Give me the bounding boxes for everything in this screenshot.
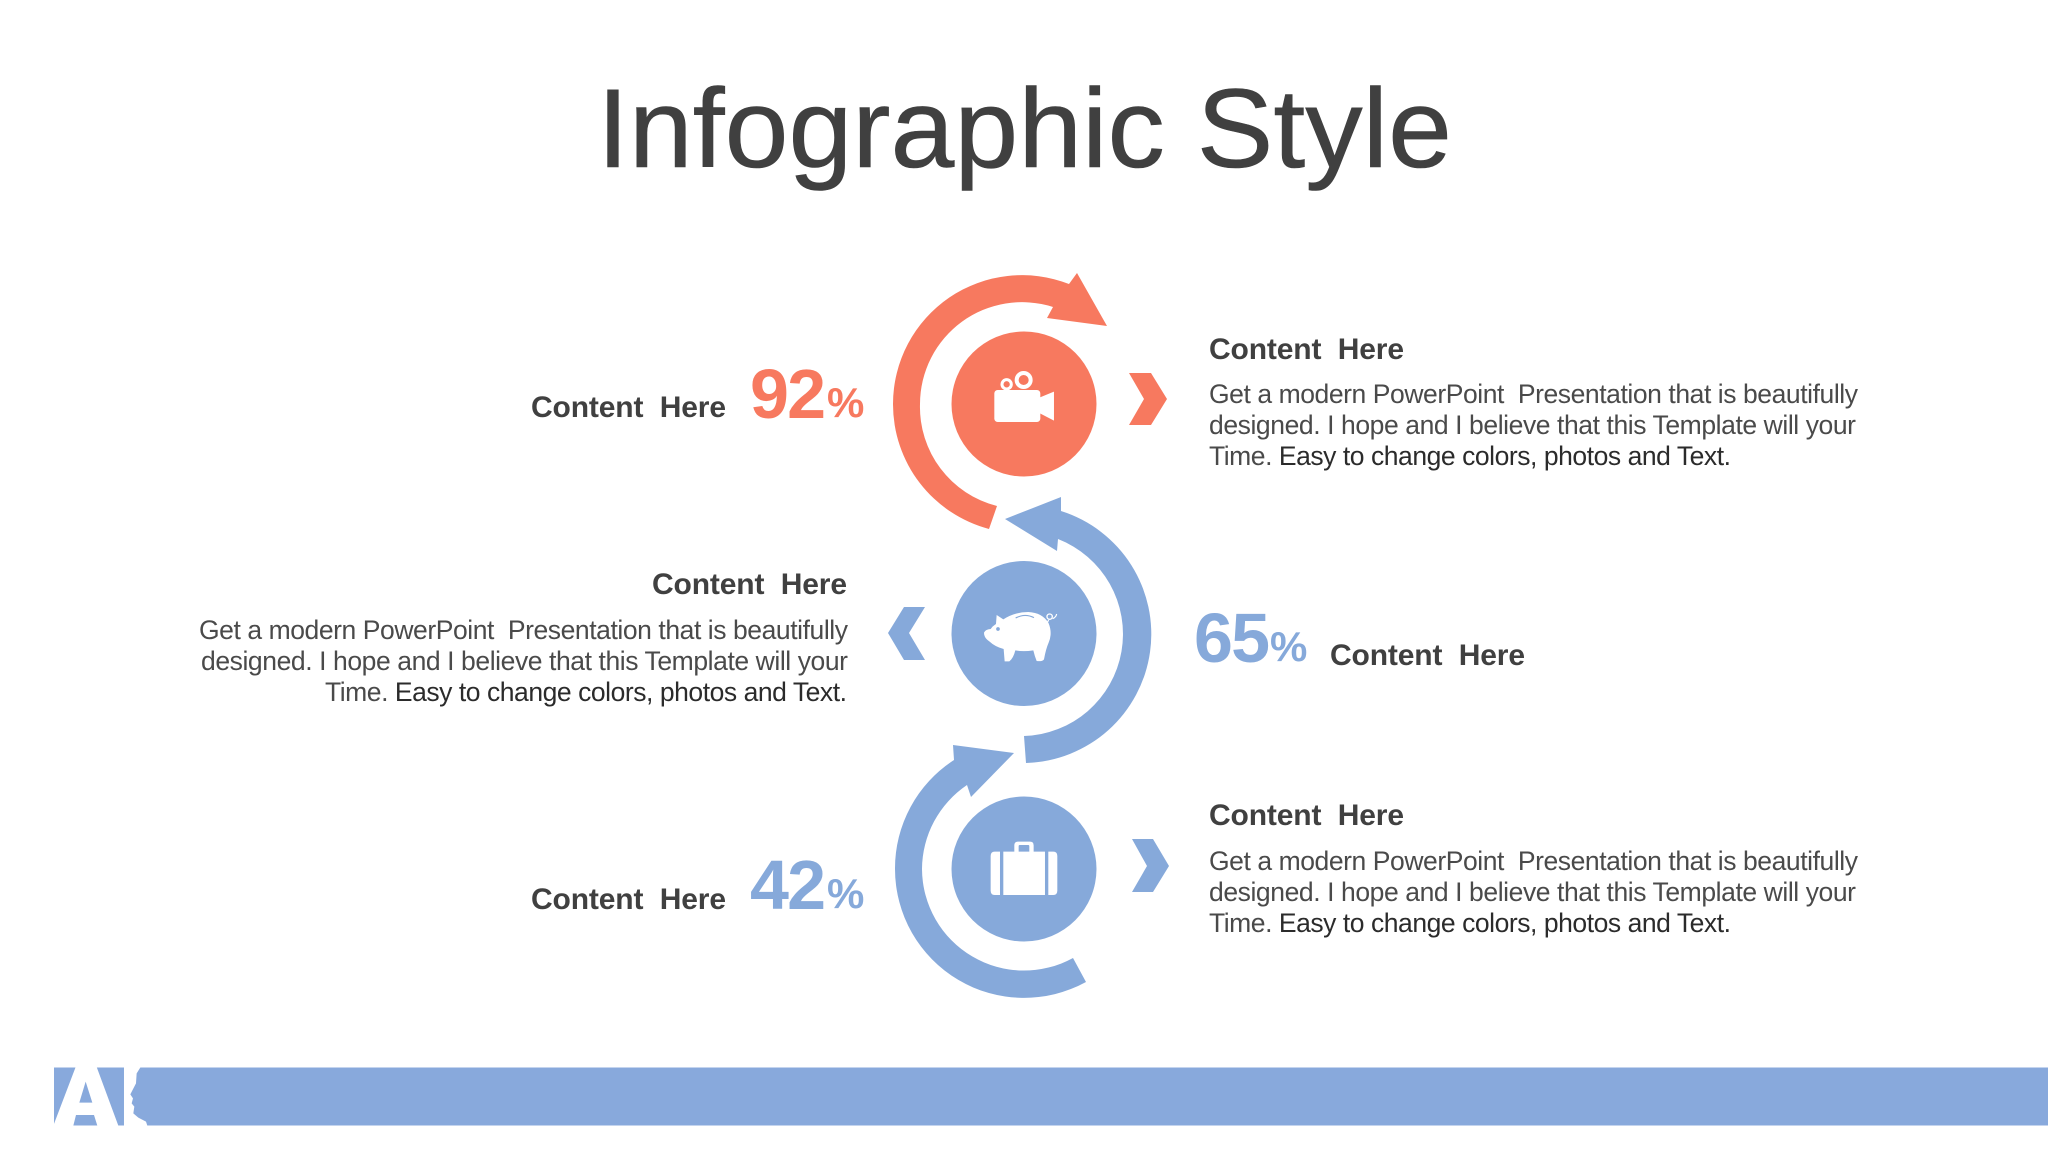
stat: 65 percent: % bbox=[1270, 623, 1307, 670]
stat: 42 percent bbox=[531, 846, 864, 924]
text block: bottom right: Content Here bbox=[1209, 799, 1404, 832]
stat: 92 percent: % bbox=[827, 379, 864, 426]
stat: 42 percent: Content Here bbox=[531, 883, 726, 916]
text block: middle left: Time. Easy to change colors, photos and Text. bbox=[325, 677, 847, 707]
text block: middle left bbox=[199, 568, 849, 707]
stat: 92 percent: 92 bbox=[750, 355, 826, 433]
stat: 42 percent: 42 bbox=[750, 846, 826, 924]
stat: 92 percent bbox=[531, 355, 864, 433]
stat: 92 percent: Content Here bbox=[531, 391, 726, 424]
text block: top right: designed. I hope and I believe that this Template will your bbox=[1209, 410, 1856, 440]
text block: bottom right bbox=[1209, 799, 1859, 938]
stat: 65 percent bbox=[1194, 599, 1525, 677]
arrow: coral arc around first circle bbox=[893, 273, 1107, 529]
title: Infographic Style bbox=[597, 66, 1452, 191]
arrow: blue chevron right bbox=[1132, 839, 1169, 892]
icon: blue circle with briefcase bbox=[952, 796, 1096, 942]
icon: blue circle with piggy bank bbox=[952, 561, 1096, 706]
icon: coral circle with film camera bbox=[952, 332, 1096, 476]
stat: 65 percent: 65 bbox=[1194, 599, 1270, 677]
arrow: blue chevron left bbox=[888, 607, 925, 660]
stat: 42 percent: % bbox=[827, 870, 864, 917]
text block: top right: Get a modern PowerPoint Presentation that is beautifully bbox=[1209, 379, 1859, 409]
text block: middle left: Get a modern PowerPoint Presentation that is beautifully bbox=[199, 615, 849, 645]
arrow: blue arc around second circle bbox=[1005, 497, 1151, 763]
text block: top right bbox=[1209, 333, 1859, 471]
text block: bottom right: designed. I hope and I believe that this Template will your bbox=[1209, 877, 1856, 907]
arrow: blue arc around third circle bbox=[895, 745, 1086, 998]
text block: top right: Time. Easy to change colors, photos and Text. bbox=[1209, 441, 1731, 471]
arrow: coral chevron right bbox=[1129, 373, 1167, 425]
text block: bottom right: Get a modern PowerPoint Presentation that is beautifully bbox=[1209, 846, 1859, 876]
footer bar with logo bbox=[53, 1067, 2048, 1126]
text block: bottom right: Time. Easy to change colors, photos and Text. bbox=[1209, 908, 1731, 938]
text block: top right: Content Here bbox=[1209, 333, 1404, 366]
text block: middle left: Content Here bbox=[652, 568, 847, 601]
text block: middle left: designed. I hope and I believe that this Template will your bbox=[201, 646, 848, 676]
stat: 65 percent: Content Here bbox=[1330, 639, 1525, 672]
